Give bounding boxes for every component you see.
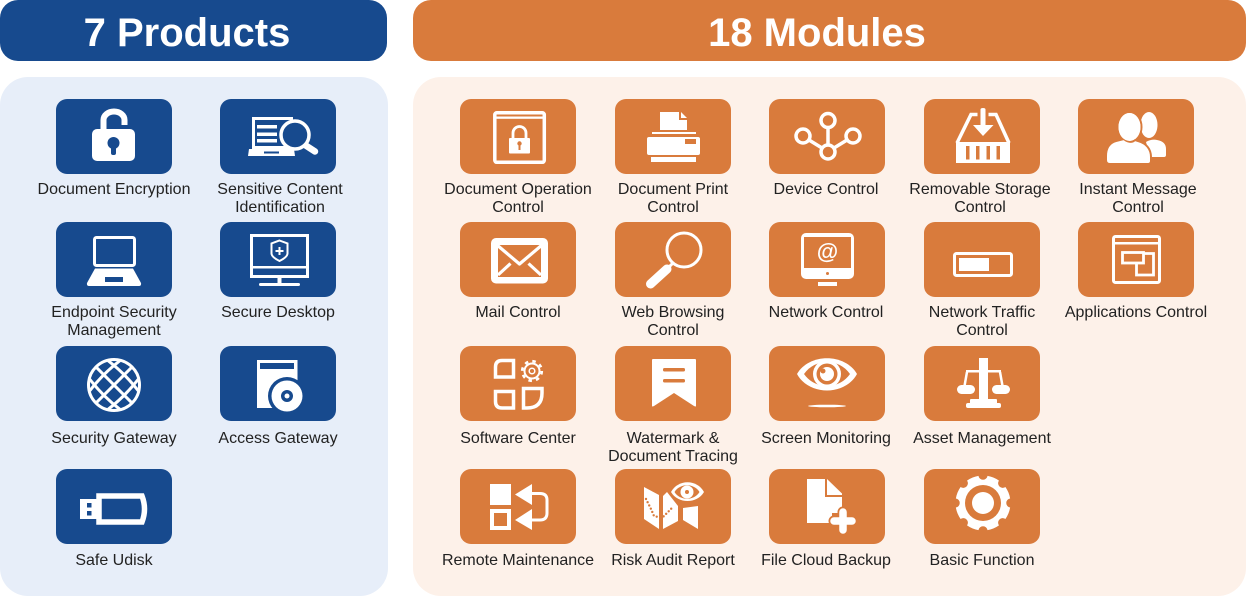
panel: products: [0, 77, 388, 596]
icon: laptop: [87, 238, 141, 286]
icon: bookmark: [652, 359, 696, 406]
icon: map with eye: [644, 482, 704, 529]
icon: globe: [88, 360, 140, 410]
heading: 7 Products: [0, 0, 387, 61]
label line 2: Control: [647, 199, 699, 216]
icon: gear: [956, 476, 1010, 530]
item: Risk Audit Report: [611, 469, 735, 569]
label: Applications Control: [1065, 304, 1207, 321]
label: Endpoint Security: [51, 304, 177, 321]
item: Document Print Control: [615, 99, 731, 216]
label: Web Browsing: [622, 304, 724, 321]
heading: 18 Modules: [413, 0, 1246, 61]
item: Security Gateway: [51, 346, 177, 447]
icon: storage tray with arrow: [956, 108, 1010, 163]
label line 2: Management: [67, 322, 161, 339]
icon: window with padlock: [494, 113, 545, 162]
item: Sensitive Content Identification: [217, 99, 343, 216]
label: Software Center: [460, 430, 576, 447]
label: Removable Storage: [909, 181, 1051, 198]
item: Endpoint Security Management: [51, 222, 177, 339]
label line 2: Identification: [235, 199, 325, 216]
icon: connected nodes: [796, 114, 860, 159]
icon: monitor with at sign: @: [817, 239, 838, 264]
item: Document Operation Control: [444, 99, 592, 216]
icon: padlock: [92, 112, 135, 161]
label line 2: Control: [647, 322, 699, 339]
label: Watermark &: [627, 430, 720, 447]
icon: box with disc: [257, 360, 306, 415]
item: Removable Storage Control: [909, 99, 1051, 216]
icon: envelope: [491, 238, 548, 284]
label: Sensitive Content: [217, 181, 343, 198]
panel: modules: [413, 77, 1246, 596]
label line 2: Control: [492, 199, 544, 216]
label: Asset Management: [913, 430, 1051, 447]
label: Basic Function: [930, 552, 1034, 569]
item: Secure Desktop: [220, 222, 336, 321]
label line 2: Control: [956, 322, 1008, 339]
label: Network Traffic: [929, 304, 1035, 321]
item: Instant Message Control: [1078, 99, 1197, 216]
icon: laptop with magnifier: [248, 118, 315, 156]
label: Instant Message: [1079, 181, 1197, 198]
item: Watermark & Document Tracing: [608, 346, 738, 465]
item: Mail Control: [460, 222, 576, 321]
icon: app windows: [1113, 236, 1160, 282]
icon: app tiles and gear: [496, 360, 542, 408]
item: Applications Control: [1065, 222, 1207, 321]
item: Network Control: [769, 222, 885, 321]
label: Remote Maintenance: [442, 552, 594, 569]
label: Risk Audit Report: [611, 552, 735, 569]
label: Safe Udisk: [75, 552, 154, 569]
heading: 18 Modules: 18 Modules: [708, 11, 926, 55]
item: Device Control: [769, 99, 885, 198]
item: Software Center: [460, 346, 576, 447]
item: Remote Maintenance: [442, 469, 594, 569]
label line 2: Control: [1112, 199, 1164, 216]
icon: magnifier: [650, 233, 701, 284]
label: Document Encryption: [38, 181, 190, 198]
item: Asset Management: [913, 346, 1051, 447]
icon: swap squares and arrows: [490, 484, 547, 530]
label: Security Gateway: [51, 430, 177, 447]
label: Access Gateway: [218, 430, 338, 447]
label: Device Control: [774, 181, 878, 198]
item: Document Encryption: [38, 99, 190, 198]
icon: monitor with shield: [251, 236, 308, 286]
icon: scales: [957, 358, 1010, 408]
label: Document Print: [618, 181, 729, 198]
item: Access Gateway: [218, 346, 338, 447]
icon: file with plus: [807, 479, 852, 530]
label: Mail Control: [475, 304, 561, 321]
item: File Cloud Backup: [761, 469, 891, 569]
label line 2: Control: [954, 199, 1006, 216]
icon: printer: [647, 112, 700, 162]
icon: eye: [797, 358, 857, 407]
label: Secure Desktop: [221, 304, 335, 321]
item: Screen Monitoring: [761, 346, 891, 447]
item: Network Traffic Control: [924, 222, 1040, 339]
label: Document Operation: [444, 181, 592, 198]
label: File Cloud Backup: [761, 552, 891, 569]
label: Screen Monitoring: [761, 430, 891, 447]
label line 2: Document Tracing: [608, 448, 738, 465]
label: Network Control: [769, 304, 883, 321]
icon: progress bar: [954, 254, 1012, 276]
heading: 7 Products: 7 Products: [84, 11, 290, 55]
item: Safe Udisk: [56, 469, 172, 569]
item: Web Browsing Control: [615, 222, 731, 339]
icon: USB stick: [80, 496, 144, 522]
item: Basic Function: [924, 469, 1040, 569]
icon: two users: [1106, 112, 1166, 164]
